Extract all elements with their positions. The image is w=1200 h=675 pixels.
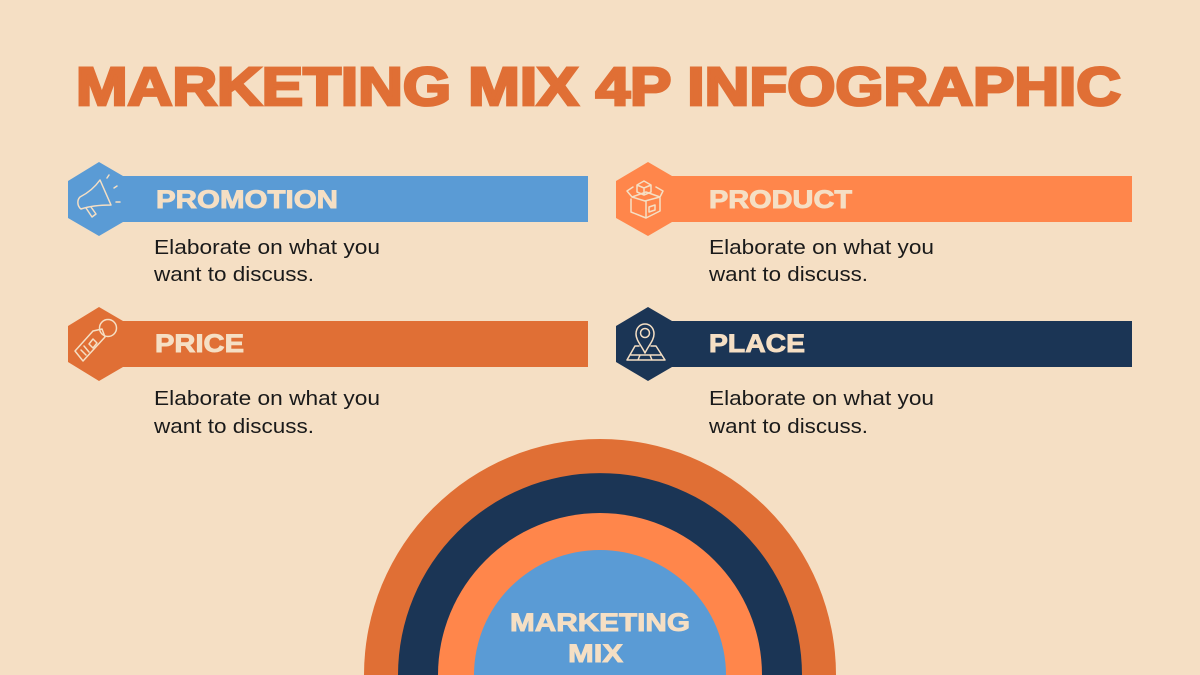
chart: concentric semicircles <box>364 439 836 675</box>
product banner <box>616 162 1132 236</box>
label: marketing mix: MARKETING <box>510 609 690 637</box>
icon: box <box>627 181 663 218</box>
text: price description: Elaborate on what you <box>154 387 380 410</box>
promotion banner <box>68 162 588 236</box>
title: MARKETING MIX 4P INFOGRAPHIC <box>76 57 1121 117</box>
panel: promotion <box>68 162 588 286</box>
text: product description: Elaborate on what you <box>709 236 934 259</box>
panel: price: want to discuss. <box>153 415 314 438</box>
panel: place: want to discuss. <box>708 415 868 438</box>
icon: megaphone <box>78 175 120 217</box>
panel: price <box>68 307 588 438</box>
heading: product: PRODUCT <box>709 186 852 214</box>
panel: product <box>616 162 1132 286</box>
icon: price tag <box>75 320 116 361</box>
heading: price: PRICE <box>155 330 244 358</box>
text: place description: Elaborate on what you <box>709 387 934 410</box>
price banner <box>68 307 588 381</box>
panel: place <box>616 307 1132 438</box>
label: marketing mix: MIX <box>568 640 623 668</box>
panel: product: want to discuss. <box>708 263 868 286</box>
place banner <box>616 307 1132 381</box>
panel: promotion: want to discuss. <box>153 263 314 286</box>
text: promotion description: Elaborate on what you <box>154 236 380 259</box>
heading: promotion: PROMOTION <box>156 186 338 214</box>
heading: place: PLACE <box>709 330 805 358</box>
icon: map pin <box>627 324 665 360</box>
label: marketing mix <box>510 609 690 668</box>
